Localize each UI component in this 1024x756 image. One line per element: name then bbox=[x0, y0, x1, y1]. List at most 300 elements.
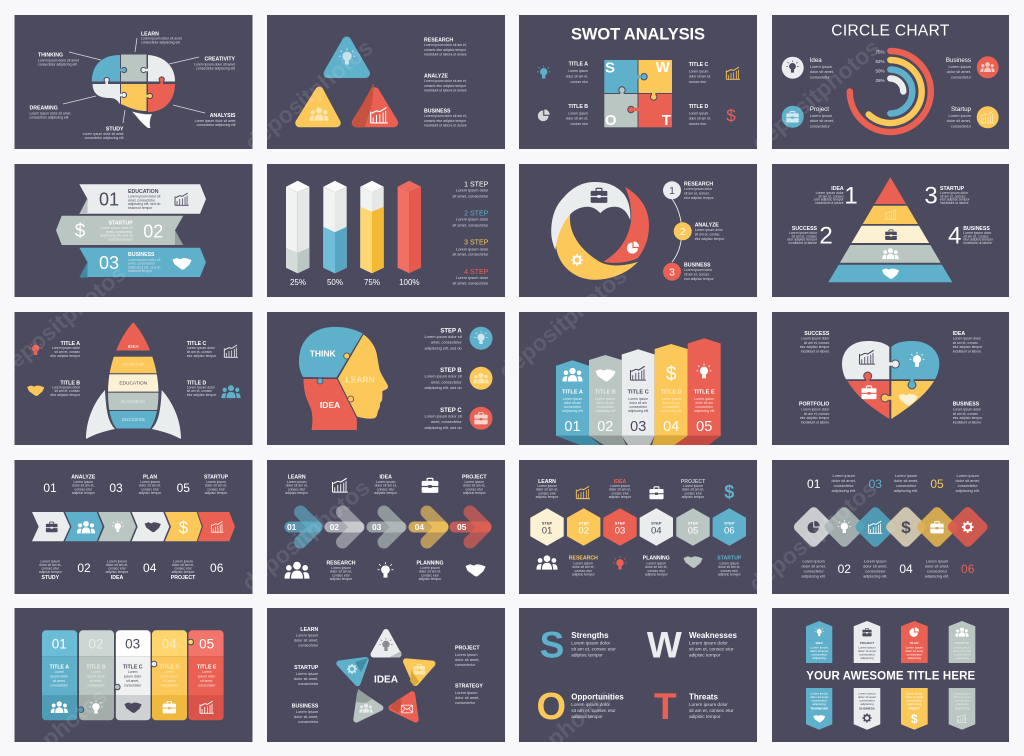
tag: success: adipiscing bbox=[955, 702, 969, 706]
percent labels: 75% bbox=[364, 278, 380, 287]
text: idea: dolor sit am et, bbox=[609, 488, 631, 492]
text: business: sit am et, consec bbox=[953, 412, 978, 416]
text: bottom lorem 3: adipiscing elit. bbox=[925, 574, 949, 578]
watermark text: depositphotos bbox=[240, 34, 378, 156]
text: study: dolor sit am et, bbox=[39, 563, 61, 567]
hexagon 01: STEP bbox=[542, 520, 553, 526]
text: business: etur adipisic tempor bbox=[953, 416, 983, 420]
panel: triangles bbox=[267, 15, 505, 149]
ribbon 02: 02 bbox=[143, 222, 163, 242]
text: idea: adipisic tempor bbox=[106, 570, 129, 574]
tag: idea: Lorem ipsum bbox=[811, 646, 828, 650]
panel: pyramid bbox=[772, 164, 1009, 297]
text: title d: consec etur bbox=[689, 122, 707, 126]
icon: bulb bbox=[537, 66, 550, 78]
text: analysis: ANALYSIS bbox=[210, 113, 236, 119]
hexagon 02: STEP bbox=[578, 520, 589, 526]
text: 1 step: sit amet, consectetur bbox=[452, 194, 489, 199]
numbers top bbox=[807, 477, 944, 491]
text: business: sit am et, conser, bbox=[684, 272, 710, 276]
panel: ribbon arrows bbox=[14, 164, 252, 297]
column 02 content: ipsum dolor bbox=[87, 674, 106, 678]
text: planning: PLANNING bbox=[416, 560, 444, 566]
column 05: dolor sit am bbox=[695, 401, 713, 405]
text: step c: adipiscing elit, sed do bbox=[424, 425, 462, 430]
column 03: 03 bbox=[630, 419, 646, 435]
panel: tag cards bbox=[772, 608, 1009, 742]
text: title c: etur adipisic tempor bbox=[187, 354, 217, 358]
text: idea: consec etur bbox=[108, 566, 127, 570]
percent labels: 25% bbox=[290, 278, 306, 287]
arrow numbers: 05 bbox=[457, 522, 467, 532]
text: study: Lorem ipsum bbox=[40, 560, 60, 564]
tag: teamwork: Lorem ipsum bbox=[811, 692, 828, 696]
tag: success: consectetur bbox=[954, 698, 970, 702]
text: learn: adipisic tempor bbox=[536, 495, 559, 499]
text: project: Lorem ipsum bbox=[455, 652, 478, 657]
text: title d: TITLE D bbox=[689, 104, 709, 110]
text: step b: amet, consectetur bbox=[431, 379, 462, 384]
column 04 bbox=[655, 344, 688, 436]
chart labels: 62% bbox=[875, 59, 884, 64]
text: top lorem 3: Lorem ipsum bbox=[956, 473, 979, 478]
text: title a: TITLE A bbox=[569, 62, 588, 68]
triangle: top bbox=[374, 632, 401, 658]
connector curve bbox=[672, 199, 682, 262]
hexagon 02: 02 bbox=[578, 526, 589, 536]
text: dreaming: Lorem ipsum dolor sit amet bbox=[30, 112, 70, 116]
text: top lorem 3: dolor sit amet, bbox=[955, 478, 980, 483]
column 04: Lorem ipsum bbox=[661, 397, 681, 401]
text: planning: Lorem ipsum bbox=[646, 562, 666, 566]
tag: teamwork: dolor sit amet bbox=[810, 695, 828, 699]
text: success: SUCCESS bbox=[804, 331, 830, 337]
text: study: Lorem ipsum dolor sit amet bbox=[83, 132, 124, 136]
text: analyze: conseic etur adipisic tempor bbox=[424, 84, 467, 88]
text: bottom lorem 1: adipiscing elit. bbox=[801, 574, 826, 578]
numbers top: 03 bbox=[869, 477, 882, 491]
hexagon 04: 04 bbox=[651, 526, 662, 536]
text: business: BUSINESS bbox=[684, 263, 711, 269]
text: analyze: incididunt ut labore et dolore bbox=[424, 89, 467, 93]
text: idea: sit am et, consec bbox=[953, 341, 978, 345]
text: project: consec etur bbox=[174, 566, 193, 570]
text: analyze: ANALYZE bbox=[424, 74, 449, 80]
hexagon 02 bbox=[567, 508, 600, 546]
panel: swot puzzle bbox=[519, 15, 757, 149]
text: title c: Lorem ipsum dolor bbox=[187, 346, 216, 350]
text: startup: adipisic tempor bbox=[718, 572, 742, 576]
text: success: Lorem ipsum dolor bbox=[789, 231, 818, 235]
numbers top: 03 bbox=[109, 481, 123, 495]
triangle: red bbox=[389, 694, 416, 720]
text: research: dolor sit am et, bbox=[572, 565, 594, 569]
text: title a: Lorem ipsum dolor bbox=[52, 346, 81, 350]
text: success: incididunt ut labore bbox=[789, 241, 817, 245]
numbers bottom: 06 bbox=[210, 561, 224, 575]
text: project: dolor sit amet, bbox=[455, 657, 479, 662]
watermark text: photos bbox=[542, 683, 617, 752]
ribbon 01: 01 bbox=[99, 190, 119, 210]
text: strategy: STRATEGY bbox=[455, 684, 483, 690]
numbers top: 01 bbox=[43, 481, 57, 495]
text: project: PROJECT bbox=[462, 474, 487, 480]
rocket body: SUCCESS bbox=[122, 417, 145, 423]
column 05 content: consectetur bbox=[198, 684, 216, 688]
bar 25% bbox=[286, 181, 309, 273]
watermark text: depositphotos bbox=[747, 34, 885, 156]
text: portfolio: incididunt ut labore bbox=[801, 420, 829, 424]
column 04 content: ipsum dolor bbox=[161, 674, 179, 678]
chart labels: 25% bbox=[875, 78, 884, 83]
text: business: dolor sit amet, bbox=[947, 69, 971, 74]
icon: people badge bbox=[470, 367, 492, 390]
text: business: incididunt ut labore bbox=[953, 420, 981, 424]
puzzle: swot: T bbox=[662, 112, 671, 129]
ribbon 01: amet, consectetur bbox=[128, 198, 156, 202]
ribbon 03: Lorem ipsum dolor sit bbox=[128, 258, 160, 262]
text: top lorem 1: adipiscing elit. bbox=[831, 488, 856, 493]
text: project: dolor sit am et, bbox=[682, 488, 704, 492]
text: step a: adipiscing elit, sed do bbox=[424, 345, 462, 350]
chart labels: 50% bbox=[875, 68, 884, 74]
text: idea: dolor sit am et, bbox=[375, 484, 397, 488]
tag: plan bbox=[901, 621, 928, 663]
text: top lorem 2: consectetur bbox=[896, 483, 917, 488]
tag: business: consectetur bbox=[859, 698, 875, 702]
column 01 content: Lorem bbox=[54, 670, 64, 674]
text: success: Lorem ipsum dolor bbox=[801, 337, 830, 341]
ribbon 03: amet, consectetur bbox=[128, 262, 156, 266]
icon: dollar: $ bbox=[724, 482, 734, 502]
text: research: sit am et, conser, bbox=[684, 192, 710, 196]
text: creativity: Lorem ipsum dolor sit amet bbox=[194, 62, 235, 66]
head puzzle diagram: THINK bbox=[310, 348, 337, 358]
icon: case badge bbox=[470, 407, 492, 430]
column 02: 02 bbox=[597, 419, 613, 435]
text: research: Lorem ipsum bbox=[331, 566, 351, 570]
ribbon 02: Lorem ipsum dolor sit bbox=[100, 226, 133, 230]
text: bottom lorem 2: dolor sit amet, bbox=[863, 564, 888, 568]
tag: teamwork: consectetur bbox=[811, 698, 827, 702]
text: top lorem 3: consectetur bbox=[958, 483, 978, 488]
text: strengths: Strengths bbox=[571, 631, 609, 640]
numbers bottom bbox=[77, 561, 224, 575]
text: title b: Lorem ipsum bbox=[568, 112, 588, 116]
ribbon 03: BUSINESS bbox=[128, 252, 155, 258]
step 1: 1 bbox=[669, 186, 675, 197]
chart labels bbox=[875, 50, 884, 83]
tag: profit: PROFIT bbox=[909, 706, 920, 710]
arrow numbers: 03 bbox=[372, 522, 382, 532]
text: title c: Lorem ipsum bbox=[689, 70, 708, 74]
text: bottom lorem 1: dolor sit amet, bbox=[801, 564, 826, 568]
column 01: TITLE A bbox=[562, 390, 583, 396]
numbers bottom: 06 bbox=[961, 562, 975, 576]
text: business: Lorem ipsum dolor sit am et, bbox=[424, 114, 467, 118]
tag: idea: dolor sit amet bbox=[810, 649, 828, 653]
column 01: Lorem ipsum bbox=[563, 397, 582, 401]
ribbon 02: amet, consectetur bbox=[106, 230, 134, 234]
center label: IDEA bbox=[374, 674, 398, 686]
tag: teamwork: TEAMWORK bbox=[810, 706, 829, 710]
text: top lorem 3: adipiscing elit. bbox=[955, 488, 980, 493]
text: startup: STARTUP bbox=[940, 186, 965, 192]
text: study: STUDY bbox=[106, 126, 124, 132]
text: idea: etur adipisic tempor bbox=[953, 345, 983, 349]
column 03 content: consectetur bbox=[124, 684, 142, 688]
text: analyze: sit am et, conser, bbox=[695, 232, 720, 236]
panel: swot letters bbox=[519, 608, 757, 742]
column 05: consectetur bbox=[695, 405, 714, 409]
text: step b: adipiscing elit, sed do bbox=[424, 385, 462, 390]
text: planning: consec etur bbox=[648, 569, 666, 573]
panel: puzzle strip bbox=[14, 608, 252, 742]
icon: idea bbox=[782, 57, 804, 79]
text: top lorem 1: consectetur bbox=[834, 483, 854, 488]
text: project: Lorem ipsum bbox=[173, 560, 193, 564]
tag: success bbox=[949, 688, 975, 730]
icon: people bbox=[221, 385, 241, 398]
text: idea: Lorem ipsum dolor bbox=[953, 337, 982, 341]
column 01 content: ipsum dolor bbox=[51, 674, 69, 678]
text: project: Project bbox=[810, 106, 829, 113]
icon: people bbox=[536, 555, 558, 570]
text: title b: consec etur bbox=[570, 122, 589, 126]
column 01 content: TITLE A bbox=[50, 664, 69, 670]
column 03: dolor sit am bbox=[629, 401, 647, 405]
text: dreaming: consectetur adipiscing elit bbox=[30, 116, 68, 120]
text: learn: LEARN bbox=[288, 474, 306, 480]
column 05: Lorem ipsum bbox=[694, 397, 714, 401]
text: idea: dolor sit amet, bbox=[810, 69, 834, 74]
column 01: dolor sit am bbox=[564, 401, 581, 405]
triangle: red chart bbox=[352, 83, 394, 127]
text: business: BUSINESS bbox=[953, 402, 980, 408]
text: planning: Lorem ipsum bbox=[420, 566, 440, 570]
tag: startup: dolor sit amet bbox=[953, 649, 971, 653]
text: analyze: adipisic tempor bbox=[72, 491, 96, 495]
text: 2 step: sit amet, consectetur bbox=[452, 223, 489, 228]
text: analyze: etur adipisic tempor bbox=[695, 237, 725, 241]
panel: heart puzzle bbox=[772, 312, 1009, 445]
numbers bottom bbox=[838, 562, 975, 576]
text: step c: STEP C bbox=[440, 408, 462, 414]
text: research: dolor sit am et, bbox=[330, 570, 352, 574]
tag: profit bbox=[901, 688, 928, 730]
panel: rocket bbox=[14, 312, 252, 445]
hexagon 03: STEP bbox=[615, 520, 626, 526]
column 03 content: sit amet, bbox=[126, 679, 139, 683]
text: idea: adipisic tempor bbox=[374, 491, 398, 495]
tag: idea: consectetur bbox=[811, 652, 827, 656]
text: project: dolor sit amet, bbox=[810, 118, 834, 123]
percent labels: 50% bbox=[327, 278, 343, 287]
text: top lorem 1: dolor sit amet, bbox=[831, 478, 856, 483]
text: project: dolor sit am et, bbox=[463, 484, 485, 488]
text: project: consectetur bbox=[455, 662, 476, 667]
text: title d: Lorem ipsum bbox=[689, 112, 708, 116]
text: learn: Lorem ipsum bbox=[296, 633, 318, 638]
text: business: BUSINESS bbox=[424, 108, 451, 114]
tag: business: Lorem ipsum bbox=[858, 692, 876, 696]
column 02 content: TITLE B bbox=[86, 664, 106, 670]
column 05: TITLE E bbox=[694, 390, 715, 396]
numbers bottom: 02 bbox=[838, 562, 851, 576]
column 05 content: 05 bbox=[199, 636, 214, 652]
text: opportunities: sit am et, consec etur bbox=[571, 708, 616, 713]
icon: case bbox=[422, 478, 438, 493]
text: idea: Lorem ipsum bbox=[810, 64, 832, 69]
text: title d: Lorem ipsum dolor bbox=[187, 385, 216, 389]
text: project: PROJECT bbox=[681, 479, 706, 485]
text: title c: sit am et, consec bbox=[187, 350, 212, 354]
step 3: 3 bbox=[669, 267, 675, 278]
column 04: dolor sit am bbox=[662, 401, 680, 405]
column 03 content: Lorem bbox=[128, 670, 138, 674]
text: top lorem 2: Lorem ipsum bbox=[895, 473, 917, 478]
column 02 content: Lorem bbox=[91, 670, 101, 674]
text: project: dolor sit am et, bbox=[172, 563, 194, 567]
text: analyze: Lorem ipsum dolor sit am et, bbox=[424, 79, 467, 83]
icon: people bbox=[285, 562, 309, 579]
text: idea: consec etur bbox=[377, 487, 395, 491]
text: strategy: Lorem ipsum bbox=[455, 690, 478, 695]
ribbon 03 bbox=[79, 248, 206, 278]
ribbon 02: adipiscing elit, sed do bbox=[100, 234, 133, 238]
text: startup: STARTUP bbox=[204, 474, 229, 480]
watermark text: depositphotos bbox=[237, 474, 375, 596]
column 02 bbox=[589, 355, 622, 436]
column 01: 01 bbox=[564, 419, 581, 435]
text: project: adipisic tempor bbox=[682, 495, 705, 499]
column 05 content: Lorem bbox=[202, 670, 212, 674]
text: planning: adipisic tempor bbox=[419, 577, 442, 581]
hexagon 01 bbox=[530, 508, 564, 546]
text: plan: Lorem ipsum bbox=[140, 480, 160, 484]
panel: hexagon steps bbox=[519, 460, 757, 594]
text: learn: Lorem ipsum bbox=[287, 480, 307, 484]
heading: circle chart: CIRCLE CHART bbox=[831, 23, 950, 40]
column 04 content: TITLE D bbox=[159, 664, 179, 670]
column 04 content: Lorem bbox=[164, 670, 174, 674]
tag: project: PROJECT bbox=[860, 641, 874, 645]
text: business: consectetur bbox=[951, 74, 972, 79]
text: idea: Lorem ipsum dolor bbox=[816, 191, 845, 195]
watermark text: depositphotos bbox=[494, 262, 632, 384]
text: title b: Lorem ipsum dolor bbox=[52, 385, 81, 389]
hexagon 04: STEP bbox=[651, 520, 662, 526]
text: step a: Lorem ipsum dolor sit bbox=[424, 334, 463, 339]
column 03 bbox=[622, 349, 655, 436]
column 05 content: ipsum dolor bbox=[198, 674, 216, 678]
column 03 content bbox=[123, 636, 143, 713]
ribbon 01 bbox=[79, 184, 206, 214]
text: bottom lorem 2: adipiscing elit. bbox=[863, 574, 888, 578]
text: 3 step: 3 STEP bbox=[464, 240, 489, 246]
text: research: incididunt ut labore et dolore bbox=[424, 53, 467, 57]
text: project: Lorem ipsum bbox=[810, 113, 832, 118]
text: project: Lorem ipsum bbox=[464, 480, 484, 484]
pyramid layers bbox=[828, 177, 952, 282]
text: project: PROJECT bbox=[171, 575, 196, 581]
text: project: consec etur bbox=[684, 491, 703, 495]
text: success: etur adipisic tempor bbox=[800, 345, 830, 349]
column 03: adipiscing elit bbox=[628, 409, 648, 413]
tag: plan: PLAN bbox=[910, 641, 918, 645]
text: analyze: ANALYZE bbox=[695, 223, 719, 229]
text: opportunities: Opportunities bbox=[571, 692, 624, 701]
text: threats: adipisic tempor bbox=[689, 714, 721, 719]
icon: chart bbox=[224, 345, 238, 357]
panel: head puzzle bbox=[267, 312, 505, 445]
icon: project bbox=[782, 106, 804, 128]
ribbon 02 bbox=[56, 216, 183, 245]
text: startup: consec etur bbox=[207, 487, 226, 491]
text: title d: etur adipisic tempor bbox=[187, 393, 217, 397]
text: idea: IDEA bbox=[614, 479, 626, 485]
text: research: consec etur bbox=[575, 569, 593, 573]
text: title b: etur adipisic tempor bbox=[50, 393, 81, 397]
text: startup: Startup bbox=[951, 106, 972, 113]
column 01 bbox=[556, 360, 589, 436]
text: bottom lorem 3: dolor sit amet, bbox=[925, 564, 949, 568]
icon: handshake bbox=[683, 556, 703, 568]
text: plan: dolor sit am et, bbox=[139, 484, 161, 488]
text: step b: STEP B bbox=[440, 368, 462, 374]
numeral 2: 2 bbox=[819, 222, 833, 250]
column 03: Lorem ipsum bbox=[628, 397, 648, 401]
column 04 content bbox=[159, 636, 179, 713]
text: research: Lorem ipsum bbox=[573, 562, 593, 566]
text: success: SUCCESS bbox=[792, 226, 818, 232]
column 03 content: TITLE C bbox=[123, 664, 143, 670]
text: title c: dolor sit am et, bbox=[689, 75, 711, 79]
text: title a: consec etur bbox=[570, 80, 589, 84]
text: title a: TITLE A bbox=[61, 341, 80, 347]
tag: startup: Lorem ipsum bbox=[953, 646, 971, 650]
tag: success: dolor sit amet bbox=[953, 695, 971, 699]
column 03: TITLE C bbox=[628, 390, 649, 396]
text: step c: Lorem ipsum dolor sit bbox=[424, 413, 463, 418]
panel: translucent arrows bbox=[267, 460, 505, 594]
text: idea: dolor sit am et, bbox=[106, 563, 128, 567]
text: portfolio: PORTFOLIO bbox=[799, 402, 829, 408]
triangle: yellow people bbox=[300, 91, 336, 123]
step 2 bbox=[674, 222, 692, 240]
chevron row bbox=[32, 512, 235, 541]
column 01 content: sit amet, bbox=[53, 679, 66, 683]
text: business: Lorem ipsum dolor bbox=[684, 268, 713, 272]
text: research: etur adipisic tempor bbox=[684, 196, 714, 200]
arrow 04 bbox=[414, 512, 443, 542]
tag: project: adipiscing bbox=[860, 656, 874, 660]
text: dreaming: DREAMING bbox=[30, 106, 58, 112]
puzzle: swot: W bbox=[656, 59, 671, 76]
column 03 content: ipsum dolor bbox=[124, 674, 142, 678]
text: learn: consec etur bbox=[288, 487, 306, 491]
panel: heart cycle bbox=[519, 164, 757, 297]
icon: chart bbox=[576, 486, 590, 499]
text: business: Lorem ipsum bbox=[296, 709, 318, 714]
hexagon 04 bbox=[640, 508, 673, 546]
text: weaknesses: sit am et, consec etur bbox=[689, 647, 734, 652]
text: title a: sit am et, consec bbox=[55, 350, 80, 354]
text: creativity: CREATIVITY bbox=[205, 56, 236, 62]
tag: business bbox=[854, 688, 880, 730]
text: portfolio: Lorem ipsum dolor bbox=[801, 408, 830, 412]
text: title d: dolor sit am et, bbox=[689, 117, 711, 121]
